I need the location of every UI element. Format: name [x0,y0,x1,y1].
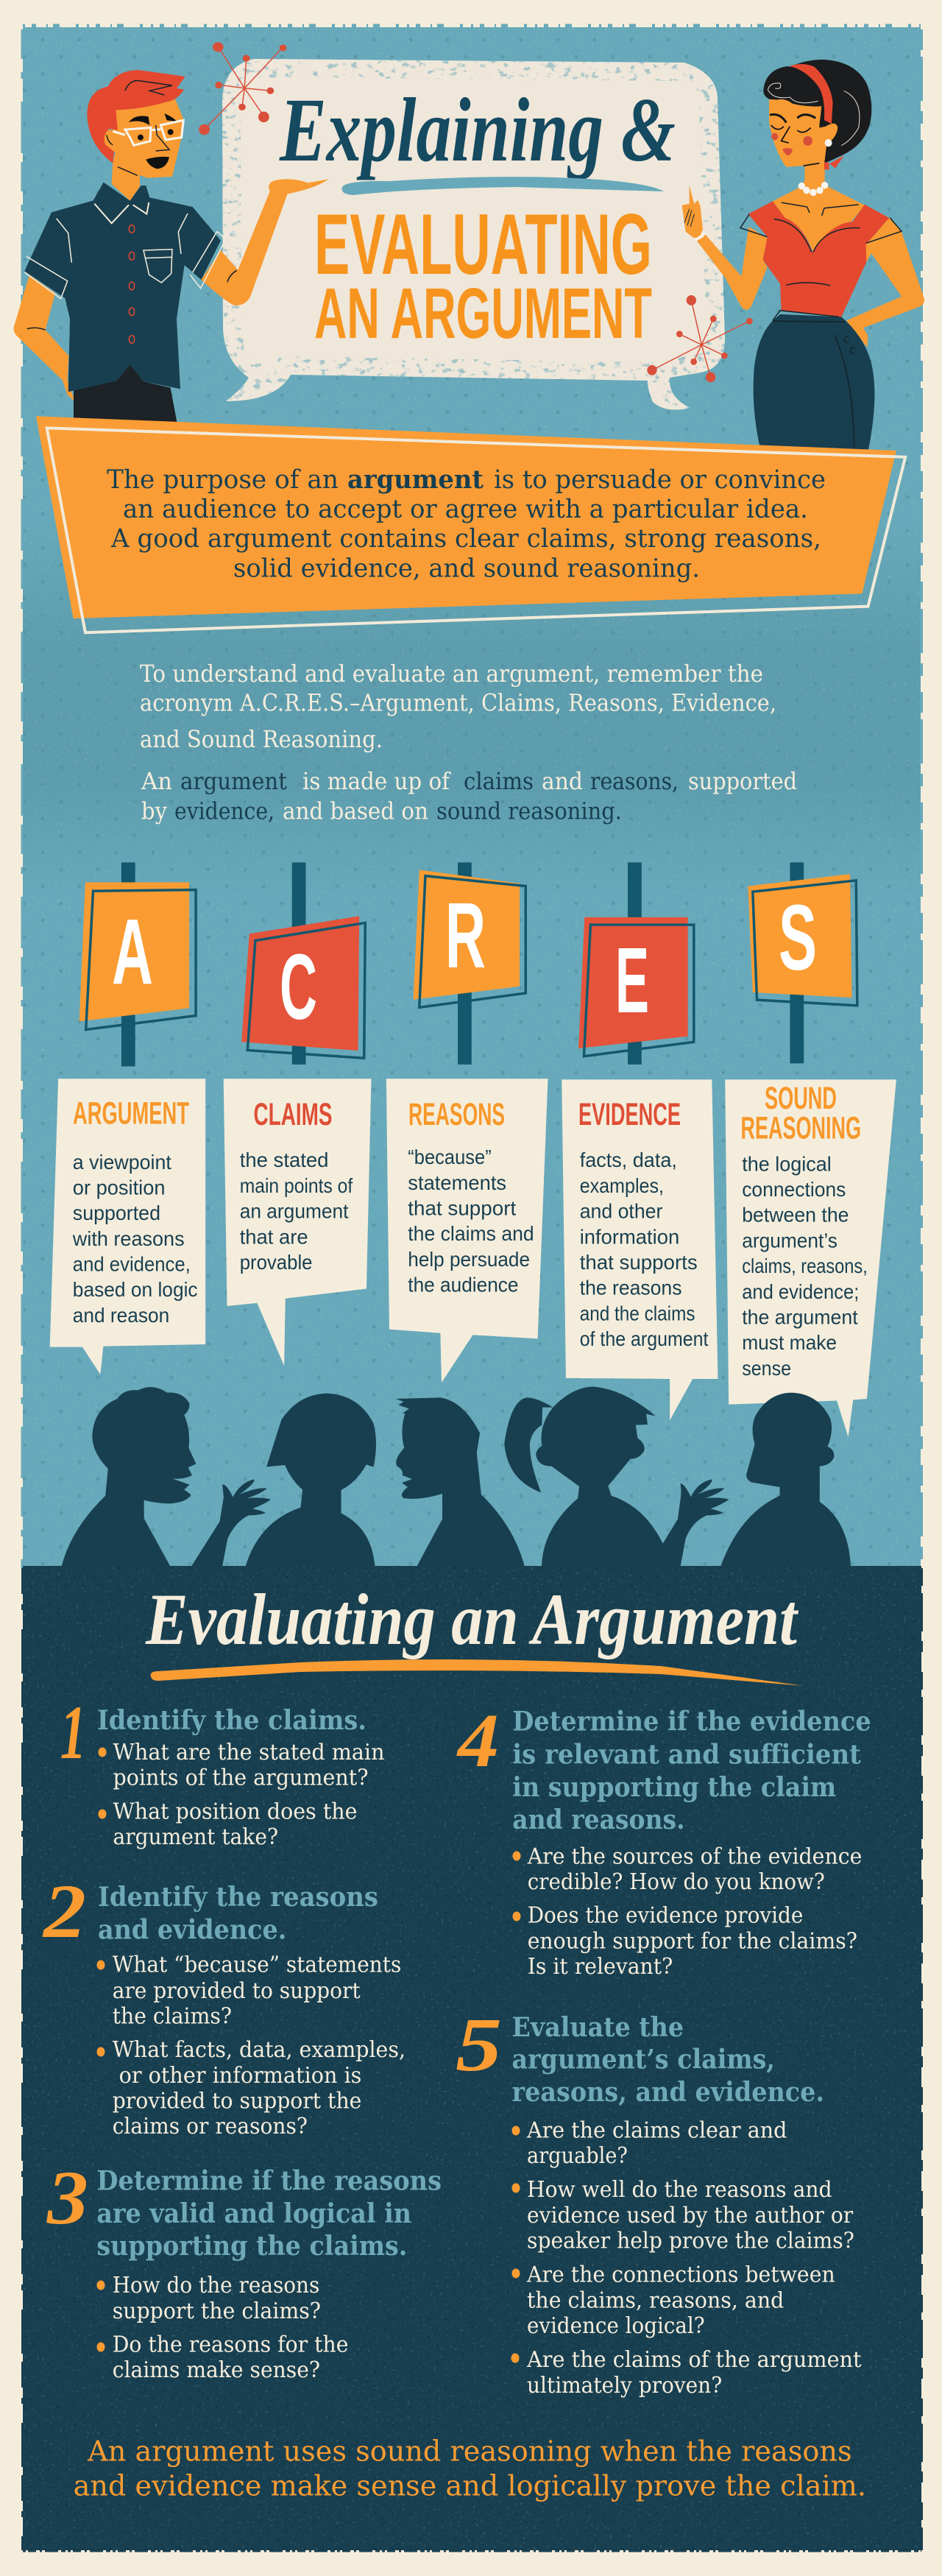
step 5 bullets: evidence logical? [527,2313,705,2339]
banner text: argument [347,465,484,495]
woman's skirt [754,314,874,450]
speech card: Sound Reasoning: claims, reasons, [742,1255,868,1277]
speech card: Reasons: “because” [408,1146,492,1168]
banner: purpose of an argument [36,416,905,632]
brush stroke under script title [342,177,664,195]
step 4 [456,1698,871,1980]
man's raised arm and hand [201,179,329,306]
woman's facial details [768,83,860,166]
step 2 bullets: What facts, data, examples, [113,2037,406,2063]
speech card: Argument: and evidence, [73,1253,191,1275]
speech card: Evidence: information [580,1225,679,1248]
intro text: definition of argument: and [542,767,583,795]
step 5 bullets: Are the claims clear and [526,2117,787,2143]
step 5 bullets: Are the claims of the argument [526,2347,862,2373]
step 2 heading: and evidence. [98,1915,286,1946]
speech card: Claims [224,1079,371,1366]
intro text: definition of argument [141,767,797,825]
speech card: Argument [50,1079,205,1375]
intro text: definition of argument: claims [464,767,534,795]
speech card: Argument: ARGUMENT [73,1095,189,1131]
step 1 bullets [99,1740,384,1850]
banner text: an audience to accept or agree with a particular idea. [123,495,808,524]
speech card: Reasons: REASONS [408,1097,505,1132]
sign R [414,862,525,1065]
speech card: Sound Reasoning: connections [742,1178,846,1201]
step 3 heading [96,2166,442,2262]
speech card: Argument: a viewpoint [73,1151,171,1174]
person 4 with ponytail and raised hand [504,1386,729,1567]
atom starburst bottom [647,295,753,382]
number 4: 4 [456,1698,499,1783]
woman's neck and chest [773,160,865,252]
sign A: A [112,900,153,1003]
step 5 [456,2002,862,2399]
speech card: Claims: an argument [240,1200,349,1223]
banner text: The purpose of an [107,465,339,495]
speech card: Evidence [562,1079,718,1420]
step 2 [42,1869,406,2139]
brush underline orange [151,1659,804,1686]
speech card: Sound Reasoning: between the [742,1204,849,1227]
step 2 heading [98,1882,378,1946]
speech card: Evidence: of the argument [580,1327,709,1350]
step 3 bullets: support the claims? [113,2298,321,2324]
number 1: 1 [60,1690,86,1775]
step 5 bullets: How well do the reasons and [527,2177,832,2203]
speech card: Claims: the stated [240,1148,328,1171]
person 5 [720,1393,851,1567]
step 3 heading: supporting the claims. [96,2231,407,2262]
step 2 bullets: are provided to support [113,1978,361,2004]
sign A [79,862,196,1066]
speech card: Reasons: statements [408,1171,506,1194]
number 3: 3 [46,2156,88,2240]
speech card: Claims: provable [240,1251,312,1274]
heading: Evaluating an Argument: Evaluating an Argument [145,1578,799,1660]
speech card: Evidence: and the claims [580,1302,695,1324]
skirt buttons [844,336,855,353]
step 2 bullets: or other information is [119,2063,361,2089]
step 4 bullets: Does the evidence provide [528,1903,803,1929]
speech card: Reasons: help persuade [408,1248,530,1271]
speech card: Sound Reasoning: SOUND [765,1081,837,1116]
panel: dark evaluation section background [22,1566,922,2551]
step 4 heading [512,1707,871,1835]
step 3 bullets: Do the reasons for the [113,2332,348,2357]
speech card: Evidence: the reasons [580,1277,681,1299]
person 3 [396,1397,525,1567]
step 5 heading [512,2012,824,2108]
speech card: Sound Reasoning: must make [742,1331,837,1354]
man's other arm [14,275,75,401]
step 4 bullets: credible? How do you know? [528,1869,825,1895]
speech card: Evidence: that supports [580,1251,698,1274]
woman's headband [790,64,833,124]
step 4 bullets: Is it relevant? [528,1954,673,1980]
finger lines [684,209,694,227]
speech card: Sound Reasoning [725,1079,896,1437]
speech card: Sound Reasoning: REASONING [740,1110,861,1146]
intro text: acronym: To understand and evaluate an argument, remember the [140,660,763,688]
woman's face [769,99,837,167]
woman's hand-on-hip arm [846,218,924,347]
speech card: Reasons: the audience [408,1274,518,1296]
hair bow [824,155,844,169]
woman's fringe [763,68,823,127]
step 2 heading: Identify the reasons [98,1882,378,1913]
step 5 bullets: Are the connections between [526,2262,835,2288]
intro text: definition of argument: argument [180,767,287,795]
step 3 heading: Determine if the reasons [96,2166,442,2197]
woman's pearl necklace [798,182,828,196]
step 4 heading: in supporting the claim [512,1772,836,1803]
step 3 bullets: claims make sense? [113,2357,320,2383]
step 5 heading: Evaluate the [512,2012,684,2043]
step 1 bullets: What are the stated main [113,1740,384,1765]
sign R: R [445,883,486,987]
step 5 heading: argument’s claims, [512,2044,775,2075]
woman's hand [682,186,703,238]
panel: blue background [22,26,921,1570]
step 2 bullets: claims or reasons? [113,2114,308,2139]
elbow creases [27,270,237,330]
man's head [87,70,185,178]
sign E [578,862,694,1065]
speech bubble [222,59,725,410]
speech card: Claims: that are [240,1225,308,1248]
closing statement: An argument uses sound reasoning when the reasons [87,2435,852,2468]
speech card: Evidence: facts, data, [580,1148,677,1171]
step 1 [60,1690,384,1850]
step 3 bullets: How do the reasons [113,2273,319,2298]
man's neck [112,162,140,201]
silhouettes of people talking [62,1386,851,1567]
intro text: acronym: and Sound Reasoning. [140,725,383,753]
speech card: Evidence: and other [580,1200,662,1223]
speech card: Claims: main points of [240,1174,353,1197]
step 4 bullets [512,1844,862,1980]
step 4 heading: and reasons. [512,1804,685,1835]
sign C: C [280,935,317,1039]
sleeve, neckline and skirt outlines [740,202,902,450]
step 2 bullets: What “because” statements [113,1952,401,1978]
woman's top [748,201,889,317]
step 2 bullets [97,1952,406,2139]
step 5 bullets: arguable? [527,2143,628,2169]
sign S [748,862,857,1063]
step 3 [46,2156,442,2383]
sign S: S [779,886,817,989]
woman's hair [763,60,871,163]
speech card: Evidence: examples, [580,1174,664,1197]
speech card: Argument: supported [73,1201,160,1224]
intro text: definition of argument: sound reasoning. [436,797,622,825]
intro text: definition of argument: An [141,767,172,795]
sign E: E [615,928,649,1032]
illustration: woman [682,60,924,450]
step 4 heading: is relevant and sufficient [512,1739,861,1770]
person 2 [246,1394,376,1567]
closing statement [74,2435,866,2502]
closing statement: and evidence make sense and logically prove the claim. [74,2469,866,2502]
speech card: Reasons: the claims and [408,1222,534,1245]
shirt buttons [129,225,135,343]
number 2: 2 [42,1869,86,1954]
banner text: solid evidence, and sound reasoning. [233,554,700,583]
intro text: definition of argument: and based on [283,797,428,825]
number 5: 5 [456,2002,502,2087]
step 5 bullets: ultimately proven? [527,2373,722,2399]
speech card: Argument: with reasons [72,1227,185,1250]
banner text [107,465,826,583]
step 3 heading: are valid and logical in [96,2198,411,2229]
woman's bracelet [695,233,706,241]
intro text: acronym [140,660,776,753]
speech card: Argument: and reason [73,1304,169,1327]
step 5 heading: reasons, and evidence. [512,2077,824,2108]
man's shirt [24,183,221,392]
sign C [241,862,365,1065]
speech card: Sound Reasoning: and evidence; [742,1280,859,1303]
step 1 bullets: points of the argument? [113,1765,368,1790]
step 3 bullets [97,2273,349,2383]
banner orange shape [36,416,905,632]
step 1 bullets: argument take? [113,1824,278,1850]
speech card: Argument: based on logic [73,1278,198,1301]
step 4 heading: Determine if the evidence [512,1707,871,1737]
person 1 [62,1387,196,1567]
speech card: Sound Reasoning: argument’s [742,1229,837,1252]
step 2 bullets: the claims? [113,2004,232,2029]
intro text: definition of argument: evidence, [174,797,275,825]
person 1 raised hand [191,1479,271,1567]
woman's pointing arm [697,227,768,310]
step 4 bullets: Are the sources of the evidence [527,1844,862,1870]
banner text: is to persuade or convince [494,465,826,495]
intro text: definition of argument: reasons, [590,767,679,795]
speech card: Evidence: EVIDENCE [578,1097,681,1132]
speech card: Claims: CLAIMS [253,1097,333,1132]
man's trousers [74,364,178,427]
step 1 heading: Identify the claims. [97,1705,366,1736]
step 2 bullets: provided to support the [113,2089,361,2114]
speech card: Sound Reasoning: sense [742,1357,791,1380]
step 5 bullets [511,2117,862,2399]
banner text: A good argument contains clear claims, strong reasons, [110,524,821,554]
intro text: definition of argument: by [141,797,167,825]
title: An Argument: AN ARGUMENT [314,273,652,353]
step 5 bullets: evidence used by the author or [527,2203,854,2229]
sign posts A C R E S [79,862,857,1066]
speech card: Sound Reasoning: the argument [742,1306,858,1328]
speech card: Argument: or position [73,1176,165,1199]
intro text: acronym: acronym A.C.R.E.S.–Argument, Claims, Reasons, Evidence, [140,689,776,717]
step 1 bullets: What position does the [113,1799,358,1824]
step 5 bullets: speaker help prove the claims? [527,2228,854,2254]
speech card: Reasons: that support [408,1197,516,1219]
atom starburst top [199,42,286,135]
step 5 bullets: the claims, reasons, and [527,2288,784,2314]
illustration: man [14,70,329,427]
step 4 bullets: enough support for the claims? [528,1928,857,1954]
title: Evaluating: EVALUATING [314,196,652,292]
intro text: definition of argument: supported [688,767,797,795]
title: Explaining &: Explaining & [279,80,676,180]
speech card: Reasons [386,1079,548,1383]
shirt details [24,202,226,299]
intro text: definition of argument: is made up of [302,767,451,795]
speech card: Sound Reasoning: the logical [742,1152,832,1175]
